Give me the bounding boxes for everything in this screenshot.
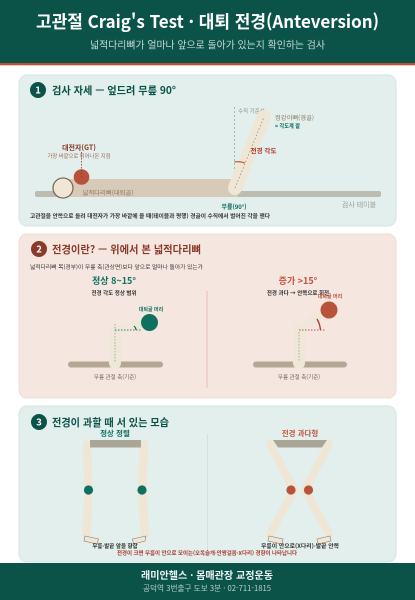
femur [66, 179, 238, 197]
step number 2 [31, 241, 47, 257]
right foot [317, 536, 331, 544]
step number 3: 3 [36, 414, 42, 428]
femoral head label: 대퇴골 머리 [318, 293, 343, 300]
anteversion angle arc [234, 162, 245, 163]
angle arc [317, 319, 320, 330]
panel 3: standing posture [19, 406, 396, 562]
vertical reference label: 수직 기준선 [238, 107, 265, 115]
excessive title: 전경 과다형 [282, 428, 318, 439]
footer address: 공덕역 3번출구 도보 3분 · 02-711-1815 [143, 583, 271, 594]
heading 2: 전경이란? — 위에서 본 넓적다리뼈 [52, 242, 201, 257]
small angle arc [134, 326, 136, 330]
left leg [86, 444, 88, 534]
axis label: 무릎 관절 축(기준) [278, 373, 320, 381]
horizontal guide [299, 329, 326, 331]
horizontal guide [115, 329, 142, 331]
step number 1: 1 [35, 82, 41, 96]
header band [0, 0, 415, 66]
right foot [132, 536, 146, 544]
knee label: 무릎(90°) [221, 202, 247, 211]
caption 3: 전경이 크면 무릎이 안으로 모이는(오목슬개·안짱걸음·X다리) 경향이 나타납니다 [117, 549, 297, 557]
vertical guide [114, 324, 116, 362]
step number 2: 2 [36, 242, 42, 256]
axis label: 무릎 관절 축(기준) [94, 373, 136, 381]
right knee [304, 485, 313, 495]
left knee [84, 485, 93, 495]
normal alignment title: 정상 정렬 [100, 428, 130, 439]
tibia label: 정강이뼈(경골) [275, 113, 314, 122]
excessive note: 무릎이 안으로(X다리)·발끝 안쪽 [261, 542, 339, 550]
knee axis bar [256, 362, 344, 368]
tibia [235, 117, 264, 188]
femoral head [141, 314, 158, 331]
femoral head [320, 302, 338, 318]
vertical reference line [234, 107, 236, 186]
heading 3: 전경이 과할 때 서 있는 모습 [52, 415, 169, 430]
normal range diagram [71, 274, 164, 381]
femur neck [115, 322, 149, 331]
panel 1: test position [19, 75, 396, 226]
femur neck [299, 310, 329, 329]
normal title: 정상 8~15° [92, 274, 136, 287]
left knee [286, 485, 296, 495]
femur label: 넓적다리뼈(대퇴골) [82, 188, 134, 197]
trochanter pointer [80, 152, 82, 178]
angle label: 전경 각도 [250, 145, 277, 155]
goniometer arm label: = 각도계 팔 [275, 122, 300, 130]
pelvis [273, 440, 327, 448]
greater trochanter marker [74, 169, 89, 185]
normal alignment figure [84, 428, 147, 550]
step number 1 [30, 82, 46, 98]
caption 1: 고관절을 안쪽으로 돌려 대전자가 가장 바깥에 올 때(테이블과 평행) 경골이 수직에서 벌어진 각을 잰다 [30, 212, 270, 220]
title: 고관절 Craig's Test · 대퇴 전경(Anteversion) [36, 9, 379, 34]
normal subtitle: 전경 각도 정상 범위 [91, 289, 137, 297]
tibia center line [235, 117, 264, 188]
trochanter note: 가장 바깥으로 튀어나온 지점 [48, 152, 110, 160]
panel 2 description: 넓적다리뼈 목(경부)이 무릎 축(관상면)보다 앞으로 얼마나 돌아가 있는가 [30, 263, 203, 271]
increased subtitle: 전경 과다 → 안쪽으로 회전 [267, 289, 329, 297]
normal alignment note: 무릎·발끝 앞을 향함 [92, 542, 138, 550]
femur shaft [293, 329, 305, 363]
excessive anteversion figure [261, 428, 339, 550]
exam table [35, 191, 381, 197]
footer [0, 563, 415, 600]
vertical guide [298, 332, 300, 362]
left foot [268, 536, 283, 544]
subtitle: 넓적다리뼈가 얼마나 앞으로 돌아가 있는지 확인하는 검사 [90, 36, 325, 52]
right leg [142, 444, 145, 534]
knee axis bar [71, 362, 160, 368]
table label: 검사 테이블 [342, 200, 377, 210]
footer name: 래미안헬스 · 몸매관장 교정운동 [141, 567, 273, 582]
step number 3 [31, 414, 47, 430]
increased title: 증가 >15° [279, 274, 318, 287]
left leg [270, 444, 294, 534]
right knee [137, 485, 147, 495]
pelvis [90, 440, 141, 448]
increased angle diagram [256, 274, 344, 381]
left foot [84, 536, 98, 544]
panel 2: what is anteversion [19, 234, 396, 398]
heading 1: 검사 자세 — 엎드려 무릎 90° [52, 83, 176, 98]
femur shaft [109, 331, 121, 363]
femoral head label: 대퇴골 머리 [139, 306, 164, 313]
trochanter label: 대전자(GT) [62, 143, 96, 153]
right leg [305, 444, 329, 534]
hip joint [53, 178, 73, 198]
